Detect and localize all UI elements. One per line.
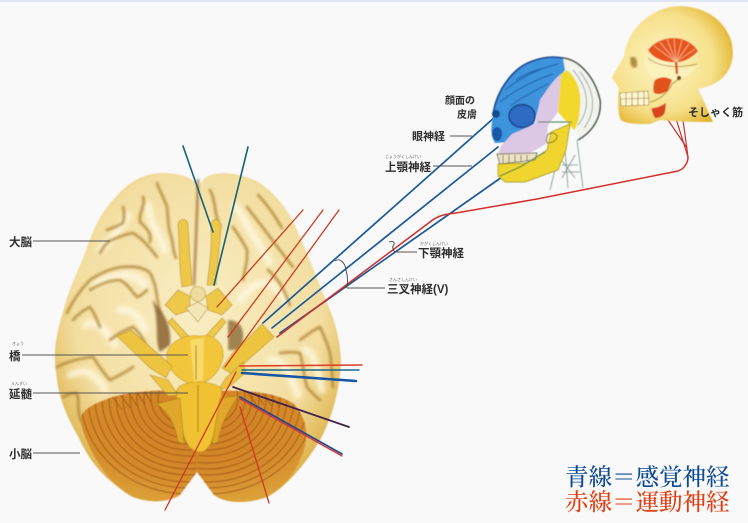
label: pons: 橋: [9, 349, 21, 363]
trigeminal sensory branches: [263, 117, 502, 333]
eye sockets: [509, 104, 535, 128]
cerebellum: [80, 390, 306, 502]
medulla: [177, 382, 222, 452]
label: pons: きょう: [12, 340, 24, 346]
ophthalmic zone in blue: [491, 57, 565, 143]
label: cerebrum: [9, 235, 110, 249]
cerebrum: [55, 173, 341, 502]
label: trigeminal nerve: [347, 276, 448, 296]
cheekbone arch: [645, 58, 697, 80]
temporal muscle: [648, 38, 698, 62]
eye socket: [630, 57, 637, 68]
skull and face: [612, 6, 733, 124]
label: maxillary nerve: じょうがくしんけい: [385, 153, 421, 159]
label: mandibular nerve: かがくしんけい: [420, 240, 448, 246]
label: trigeminal nerve: さんさしんけい: [389, 276, 417, 282]
label: maxillary nerve: 上顎神経: [385, 160, 431, 174]
motor nerve lines to upper right: [217, 210, 339, 367]
skull with sensory zones: [491, 57, 600, 190]
brain part labels: [9, 235, 188, 461]
nerve labels: [347, 94, 743, 296]
label: medulla: 延髄: [9, 387, 32, 401]
cerebellum folia right: [197, 390, 306, 495]
label: mandibular nerve: [395, 240, 464, 260]
trigeminal motor branch to masticatory muscles: [277, 157, 688, 337]
muscle branches: [666, 83, 688, 157]
lower right nerve lines: [233, 387, 349, 427]
legend: red lines are motor nerves: 赤線＝運動神経: [565, 489, 730, 516]
label: cerebellum: [9, 448, 80, 461]
olfactory and optic nerve lines: [183, 146, 248, 285]
pons: [167, 336, 223, 385]
label: maxillary nerve: [385, 153, 472, 174]
skull with masticatory muscles: [612, 6, 733, 124]
label: pons: [9, 340, 188, 363]
masseter muscle: [653, 77, 672, 94]
brain illustration: [55, 173, 341, 502]
label: trigeminal nerve: 三叉神経(V): [387, 282, 448, 296]
cerebellum folia left: [82, 390, 197, 494]
label: medulla: えんずい: [11, 380, 27, 386]
legend: [565, 464, 730, 516]
head outline and neck: [563, 58, 600, 140]
lower red nerve lines: [240, 407, 269, 503]
label: facial skin: 顔面の: [445, 94, 475, 107]
shaded cleft beside temporal lobe: [152, 300, 170, 352]
cerebrum ridge highlights: [70, 205, 322, 395]
brain-stem nerve lines: [165, 83, 688, 510]
label: cerebellum: 小脳: [9, 448, 32, 461]
label: masticatory muscles: そしゃく筋: [688, 105, 743, 119]
label: ophthalmic nerve: [412, 129, 472, 143]
label: cerebrum: 大脳: [9, 235, 32, 249]
label: facial skin: 皮膚: [457, 108, 477, 121]
label: mandibular nerve: 下顎神経: [418, 246, 464, 260]
label: ophthalmic nerve: 眼神経: [412, 129, 445, 143]
label: medulla: [9, 380, 188, 401]
jaw edge: [650, 78, 680, 102]
nerve brackets: [335, 241, 395, 288]
legend: blue lines are sensory nerves: 青線＝感覚神経: [565, 464, 730, 491]
olfactory tracts and optic chiasm: [165, 219, 232, 344]
teeth: [497, 153, 537, 164]
cerebrum folds: [57, 180, 333, 422]
trigeminal nerve roots: [117, 324, 274, 396]
mandibular zone in yellow: [558, 70, 580, 130]
teeth: [620, 91, 649, 106]
maxillary zone in pink: [498, 74, 561, 155]
horizontal nerve lines: [240, 365, 362, 366]
